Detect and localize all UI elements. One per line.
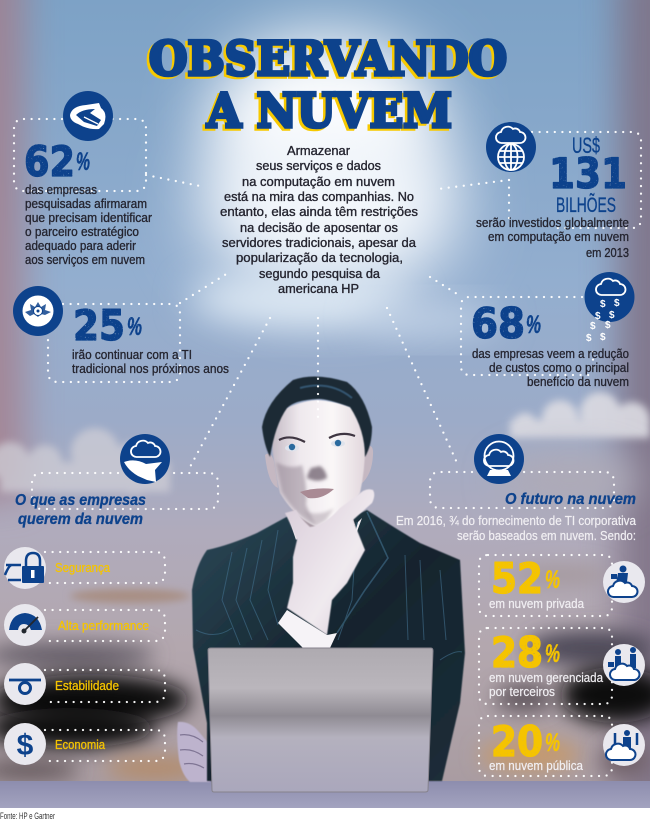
description: das empresas veem a redução — [472, 347, 629, 361]
suit — [192, 510, 465, 781]
icon: person on cloud — [603, 561, 645, 603]
stat: 52 percent nuvem privada — [479, 554, 645, 616]
title: OBSERVANDO — [146, 34, 504, 89]
intro paragraph: está na mira das companhias. No — [224, 189, 414, 204]
label US$: US$ — [572, 133, 600, 158]
stat 68%: 68 — [471, 299, 525, 348]
intro paragraph — [220, 143, 419, 296]
title: OBSERVANDO — [149, 32, 507, 87]
icon: cloud raining money: $ — [600, 299, 606, 310]
description: o parceiro estratégico — [25, 225, 139, 239]
face — [272, 400, 365, 527]
intro text: serão baseados em nuvem. Sendo: — [457, 529, 636, 543]
panel: 68 percent — [461, 272, 634, 389]
description: tradicional nos próximos anos — [72, 362, 229, 376]
left hand on laptop — [177, 722, 210, 782]
heading: O futuro na nuvem — [505, 491, 636, 508]
title: A NUVEM — [206, 84, 452, 139]
description: em 2013 — [586, 246, 629, 260]
face shadows — [276, 462, 334, 526]
description: de custos como o principal — [489, 361, 629, 375]
label: Economia — [55, 737, 106, 752]
label: Alta performance — [58, 618, 149, 633]
neck — [290, 500, 355, 540]
hand on chin — [285, 489, 374, 635]
label — [489, 671, 603, 699]
description: benefício da nuvem — [527, 375, 629, 389]
source: Fonte: HP e Gartner — [0, 811, 55, 821]
description: adequado para aderir — [25, 239, 136, 253]
hair — [262, 376, 372, 457]
hair highlight — [300, 386, 352, 398]
icon: gauge — [4, 604, 46, 646]
stat 25%: 25 — [73, 301, 125, 350]
description: aos serviços em nuvem — [25, 253, 145, 267]
intro paragraph: Armazenar — [287, 143, 351, 158]
icon: two people on cloud — [603, 644, 645, 686]
icon: cloud raining money: $ — [605, 320, 611, 331]
intro paragraph: entanto, elas ainda têm restrições — [220, 204, 419, 219]
heading — [15, 492, 146, 528]
icon: cloud raining money: $ — [590, 321, 596, 332]
intro paragraph: segundo pesquisa da — [259, 266, 381, 281]
title — [146, 32, 507, 141]
description: pesquisadas afirmaram — [25, 197, 147, 211]
icon: cloud and globe — [486, 122, 536, 172]
value: 20 — [491, 717, 543, 766]
ears — [265, 446, 373, 488]
intro text — [396, 514, 636, 543]
description: em computação em nuvem — [488, 230, 629, 244]
suit lapels and pinstripes — [196, 512, 462, 660]
intro paragraph: seus serviços e dados — [256, 158, 381, 173]
item: alta performance — [4, 604, 165, 646]
panel: 62 percent — [14, 91, 152, 267]
icon: disc — [13, 286, 63, 336]
heading: querem da nuvem — [18, 511, 143, 528]
description: irão continuar com a TI — [72, 348, 192, 362]
label: em nuvem privada — [489, 597, 584, 611]
value: % — [545, 640, 560, 668]
description: que precisam identificar — [25, 211, 152, 225]
intro paragraph: servidores tradicionais, apesar da — [222, 235, 417, 250]
icon: padlock — [4, 547, 46, 589]
icon: crystal ball cloud — [474, 434, 524, 484]
intro paragraph: na computação em nuvem — [242, 174, 395, 189]
panel: 25 percent — [13, 286, 229, 382]
description — [72, 348, 229, 376]
description: das empresas — [25, 183, 97, 197]
description: serão investidos globalmente — [476, 216, 629, 230]
value: 28 — [491, 628, 543, 677]
stat: 28 percent nuvem gerenciada — [479, 628, 645, 704]
laptop — [208, 648, 433, 792]
icon: handshake — [63, 91, 113, 141]
stat 62%: % — [76, 148, 90, 176]
value: % — [545, 566, 560, 594]
description — [476, 216, 629, 260]
icon: cloud raining money: $ — [586, 333, 592, 344]
label: em nuvem gerenciada — [489, 671, 603, 685]
mouth — [300, 488, 334, 498]
label bilhoes: BILHÕES — [556, 193, 616, 217]
item: economia — [4, 723, 165, 765]
connector dotted lines — [146, 175, 509, 467]
title: A NUVEM — [204, 86, 450, 141]
stat 131: 131 — [549, 149, 627, 198]
value: 52 — [491, 554, 543, 603]
icon: cloud raining money: $ — [595, 311, 601, 322]
heading: O que as empresas — [15, 492, 146, 509]
icon: cloud raining money: $ — [600, 332, 606, 343]
panel: 131 billion — [476, 122, 641, 260]
icon: hand holding cloud — [120, 434, 170, 484]
stat 25%: % — [127, 313, 142, 341]
stat 68%: % — [526, 311, 541, 339]
icon: dollar: $ — [17, 729, 34, 762]
illustration: thinking businessman with laptop — [177, 376, 465, 792]
icon: dollar — [4, 723, 46, 765]
icon: cloud raining money: $ — [614, 298, 620, 309]
label: Estabilidade — [55, 678, 119, 693]
panel: o futuro na nuvem — [396, 434, 636, 543]
icon: balance — [4, 663, 46, 705]
intro paragraph: popularização da tecnologia, — [236, 250, 403, 265]
intro paragraph: na decisão de aposentar os — [240, 220, 398, 235]
label: Segurança — [55, 560, 111, 575]
description — [472, 347, 629, 389]
icon: group on cloud — [603, 724, 645, 766]
label: por terceiros — [489, 685, 555, 699]
shirt collar — [288, 516, 362, 545]
icon: cloud raining money — [584, 272, 634, 344]
intro paragraph: americana HP — [278, 281, 359, 296]
item: segurança — [4, 547, 165, 589]
stat 62%: 62 — [24, 137, 75, 186]
shirt cuff — [278, 610, 337, 648]
item: estabilidade — [4, 663, 165, 705]
intro text: Em 2016, ¾ do fornecimento de TI corporativa — [396, 514, 636, 528]
icon: cloud raining money: $ — [609, 310, 615, 321]
label: em nuvem pública — [489, 759, 583, 773]
eyes and brows — [279, 434, 355, 451]
stat: 20 percent nuvem publica — [479, 716, 645, 776]
value: % — [545, 729, 560, 757]
desk — [0, 781, 650, 808]
panel: o que as empresas querem — [15, 434, 218, 528]
description — [25, 183, 152, 267]
